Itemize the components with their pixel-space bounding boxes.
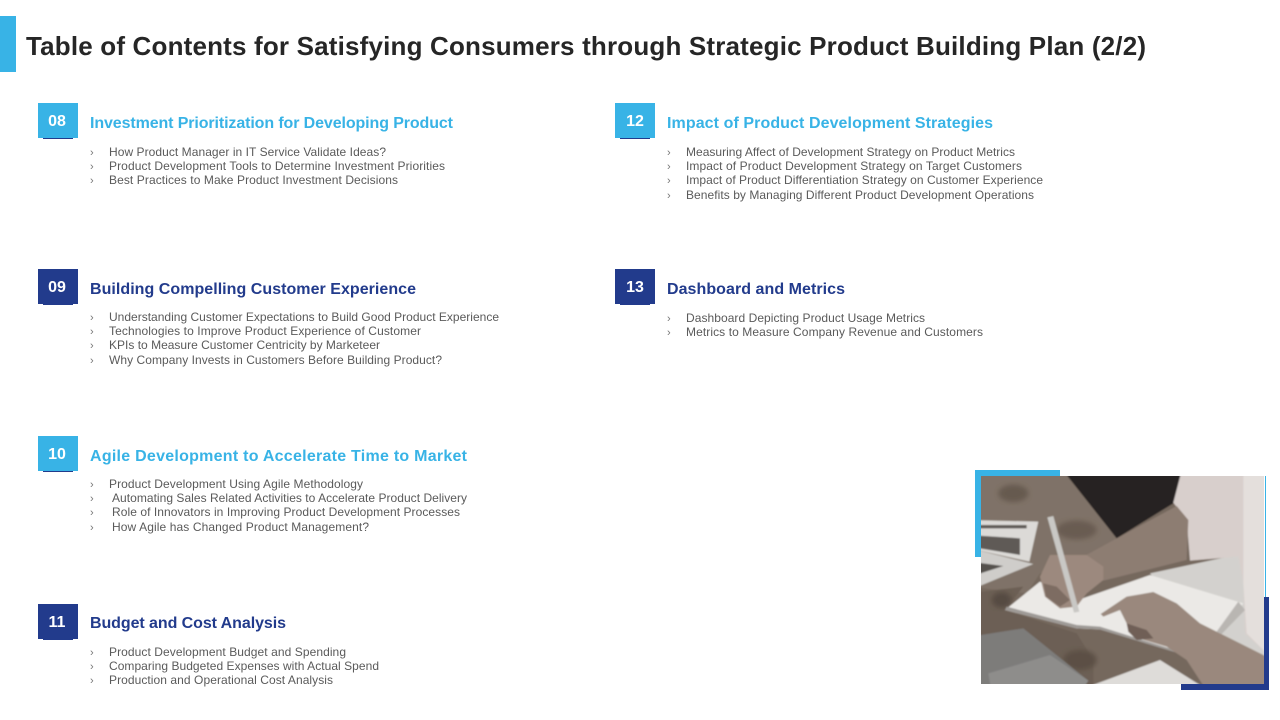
number badge 10: 10: [48, 446, 66, 463]
bullet list 09: Understanding Customer Expectations to Build Good Product Experience: [109, 310, 499, 324]
bullet list 08: Product Development Tools to Determine Investment Priorities: [109, 159, 445, 173]
bullet list 13: ›: [667, 313, 671, 325]
bullet list 08: ›: [90, 147, 94, 159]
bullet list 09: [90, 310, 499, 367]
bullet list 13: Dashboard Depicting Product Usage Metrics: [686, 311, 925, 325]
bullet list 13: ›: [667, 327, 671, 339]
pen: [1047, 516, 1079, 613]
dark background: [1066, 476, 1180, 538]
bullet list 12: ›: [667, 147, 671, 159]
heading 13: Dashboard and Metrics: [667, 281, 845, 298]
bullet list 10: ›: [90, 479, 94, 491]
section 12: [615, 103, 1043, 202]
bullet list 10: How Agile has Changed Product Management?: [112, 520, 369, 534]
bullet list 13: [667, 311, 983, 339]
title: Table of Contents for Satisfying Consumers through Strategic Product Building Plan (2/2): [26, 31, 1146, 61]
bullet list 08: ›: [90, 161, 94, 173]
bullet list 10: Role of Innovators in Improving Product Development Processes: [112, 505, 460, 519]
bullet list 12: ›: [667, 175, 671, 187]
number badge 11: 11: [49, 614, 66, 631]
second hand: [1100, 591, 1264, 684]
bullet list 11: ›: [90, 661, 94, 673]
wooden table: [981, 502, 1222, 684]
bullet list 12: Impact of Product Development Strategy on Target Customers: [686, 159, 1022, 173]
bullet list 12: ›: [667, 161, 671, 173]
bullet list 12: Impact of Product Differentiation Strategy on Customer Experience: [686, 173, 1043, 187]
number badge 13: 13: [626, 279, 644, 296]
bullet list 11: Production and Operational Cost Analysis: [109, 673, 333, 687]
bullet list 10: Automating Sales Related Activities to Accelerate Product Delivery: [112, 491, 467, 505]
bullet list 11: ›: [90, 675, 94, 687]
bullet list 09: Technologies to Improve Product Experience of Customer: [109, 324, 421, 338]
number badge 08: 08: [48, 113, 66, 130]
bullet list 12: ›: [667, 190, 671, 202]
bullet list 08: [90, 145, 445, 187]
writing hand: [1040, 555, 1103, 608]
heading 10: Agile Development to Accelerate Time to Market: [90, 448, 468, 465]
section 08: [38, 103, 454, 187]
section 10: [38, 436, 468, 534]
heading 12: Impact of Product Development Strategies: [667, 115, 993, 132]
laptop: [981, 628, 1084, 684]
number badge 10: [38, 436, 78, 472]
number badge 09: [38, 269, 78, 305]
bullet list 09: ›: [90, 312, 94, 324]
bullet list 11: ›: [90, 647, 94, 659]
notebook: [1005, 575, 1243, 654]
bullet list 10: ›: [90, 493, 94, 505]
shirt: [1172, 476, 1244, 562]
light surface behind the notebook: [1150, 556, 1264, 656]
number badge 13: [615, 269, 655, 305]
bullet list 09: ›: [90, 340, 94, 352]
upper arm: [1083, 506, 1188, 581]
section 09: [38, 269, 499, 367]
frame: thin blue edge: [1265, 476, 1266, 598]
number badge 12: [615, 103, 655, 139]
bullet list 12: [667, 145, 1043, 202]
bullet list 09: ›: [90, 355, 94, 367]
bullet list 08: ›: [90, 175, 94, 187]
frame: dark blue corner: [1181, 597, 1269, 690]
bullet list 09: ›: [90, 326, 94, 338]
number badge 11: [38, 604, 78, 640]
paper at the bottom: [1092, 659, 1200, 684]
number badge 09: 09: [48, 279, 66, 296]
bullet list 10: [90, 477, 467, 534]
bullet list 10: Product Development Using Agile Methodology: [109, 477, 363, 491]
bullet list 08: Best Practices to Make Product Investment Decisions: [109, 173, 398, 187]
number badge 08: [38, 103, 78, 139]
heading 11: Budget and Cost Analysis: [90, 615, 286, 632]
bullet list 10: ›: [90, 507, 94, 519]
bullet list 08: How Product Manager in IT Service Validate Ideas?: [109, 145, 386, 159]
heading 08: Investment Prioritization for Developing Product: [90, 115, 454, 132]
bullet list 09: Why Company Invests in Customers Before Building Product?: [109, 353, 442, 367]
title accent bar: [0, 16, 16, 72]
photo block with frame: [970, 467, 1273, 693]
bullet list 11: [90, 645, 379, 687]
section 11: [38, 604, 379, 687]
bullet list 11: Product Development Budget and Spending: [109, 645, 346, 659]
bullet list 12: Measuring Affect of Development Strategy on Product Metrics: [686, 145, 1015, 159]
bullet list 12: Benefits by Managing Different Product Development Operations: [686, 188, 1034, 202]
bullet list 13: Metrics to Measure Company Revenue and Customers: [686, 325, 983, 339]
papers on table: [981, 519, 1040, 562]
photo: hands writing in a notebook: [981, 476, 1264, 684]
number badge 12: 12: [626, 113, 644, 130]
bullet list 10: ›: [90, 522, 94, 534]
bullet list 11: Comparing Budgeted Expenses with Actual Spend: [109, 659, 379, 673]
heading 09: Building Compelling Customer Experience: [90, 281, 416, 298]
frame: light blue corner: [975, 470, 1060, 557]
bullet list 09: KPIs to Measure Customer Centricity by Marketeer: [109, 338, 380, 352]
section 13: [615, 269, 983, 339]
